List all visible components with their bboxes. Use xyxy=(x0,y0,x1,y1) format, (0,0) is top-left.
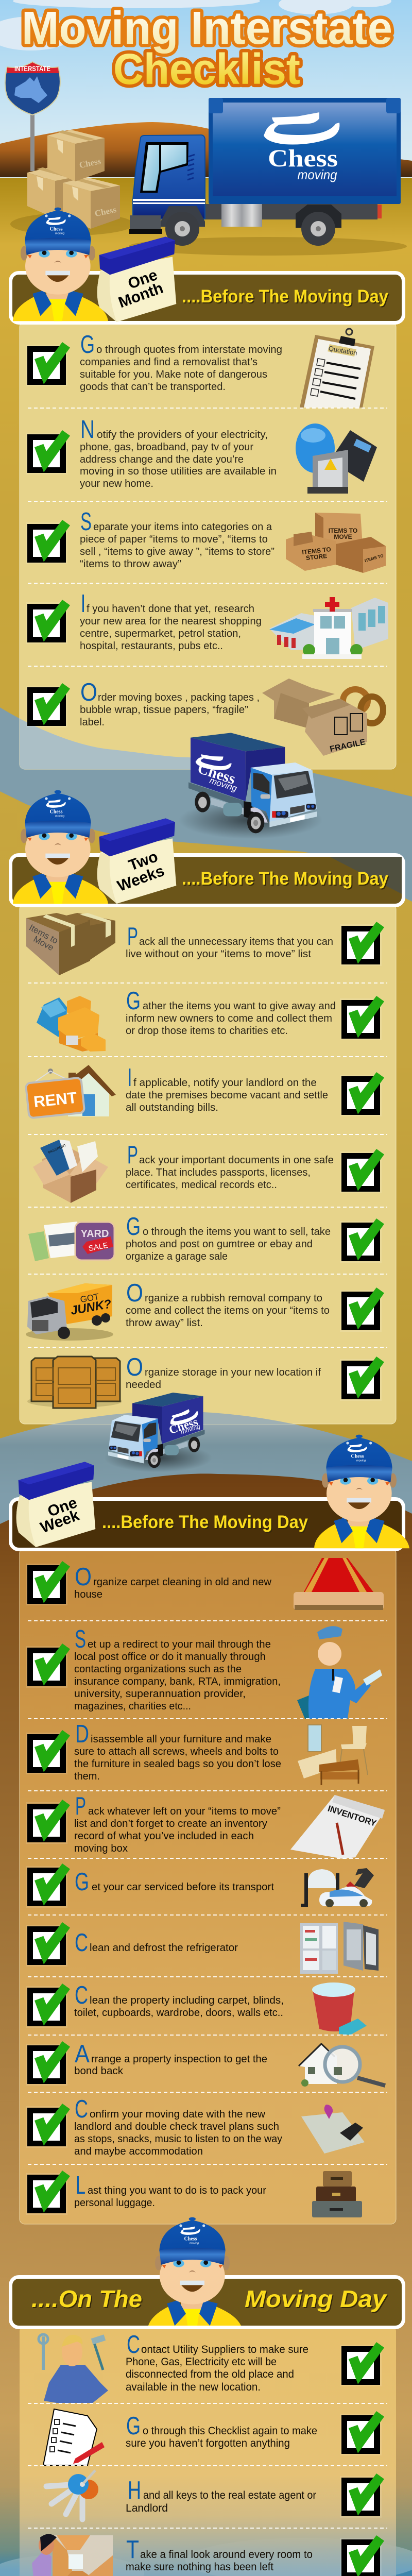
item text: label. xyxy=(80,717,105,728)
item text: sell , “items to give away ”, “items to store” xyxy=(80,546,274,557)
item text: address change and the date you’re xyxy=(80,454,244,465)
item text: ack whatever left on your “items to move” xyxy=(88,1806,281,1817)
icon: chess truck two xyxy=(104,1393,212,1472)
item text: P xyxy=(127,1141,138,1169)
heading: ....Before The Moving Day xyxy=(182,286,388,307)
icon: stacked suitcases xyxy=(312,2171,362,2217)
checkbox xyxy=(340,1218,384,1263)
item text: or drop those items to charities etc. xyxy=(126,1025,288,1037)
item text: C xyxy=(75,1981,88,2009)
item text: rder moving boxes , packing tapes , xyxy=(98,692,260,703)
item: quotes xyxy=(26,329,374,408)
item text: come and collect the items on your “items to xyxy=(126,1305,330,1316)
item text: throw away” list. xyxy=(126,1317,203,1329)
item: pack documents xyxy=(33,1140,384,1203)
delivery truck: moving xyxy=(298,167,337,182)
checkbox xyxy=(26,520,70,564)
icon: junk truck: GOT xyxy=(79,1292,100,1304)
heading: ....Before The Moving Day xyxy=(182,869,388,889)
item: storage xyxy=(27,1353,384,1408)
item text: o through quotes from interstate moving xyxy=(96,344,282,355)
dividers xyxy=(28,1621,387,2164)
item: research new area xyxy=(26,590,388,659)
item text xyxy=(74,1792,281,1854)
icon: boxes and tape: FRAGILE xyxy=(329,738,366,754)
calendar: one month: Month xyxy=(116,280,165,311)
item text: C xyxy=(127,2331,140,2359)
banner: one week xyxy=(10,1435,409,1550)
checkbox xyxy=(340,1072,384,1116)
item text: O xyxy=(126,1353,143,1381)
icon: handyman with tools xyxy=(39,2334,108,2403)
item text: place. That includes passports, licenses, xyxy=(126,1167,311,1178)
panel background xyxy=(20,2326,396,2576)
item text xyxy=(80,331,282,393)
item text: insurance company, bank, RTA, immigration, xyxy=(74,1676,281,1687)
icon: rent sign and house: RENT xyxy=(33,1089,78,1111)
calendar: one month xyxy=(97,236,176,322)
icon: car and wrench xyxy=(301,1868,374,1907)
item text: P xyxy=(75,1792,86,1820)
hill xyxy=(0,122,412,177)
item text: companies and find a removalist that’s xyxy=(80,357,258,368)
item text: make sure nothing has been left xyxy=(126,2561,273,2573)
icon: labelled boxes xyxy=(286,513,386,573)
item text: f applicable, notify your landlord on the xyxy=(133,1077,317,1089)
item text xyxy=(80,679,260,728)
road between month and two weeks sections xyxy=(0,707,412,902)
item text xyxy=(74,2095,282,2157)
item text: them. xyxy=(74,1771,100,1782)
item text xyxy=(126,1064,328,1113)
calendar: two weeks: Weeks xyxy=(115,862,167,895)
item text: toilet, cupboards, wardrobe, doors, walls etc.. xyxy=(74,2007,283,2019)
panel: two weeks checklist xyxy=(20,907,397,1424)
icon: bucket and sponge xyxy=(312,1982,367,2035)
item: carpet xyxy=(26,1558,384,1610)
checkbox xyxy=(26,600,70,644)
item text: o through this Checklist again to make xyxy=(143,2425,317,2437)
item: clean property xyxy=(26,1981,367,2035)
item: go through checklist xyxy=(44,2409,384,2465)
item text: personal luggage. xyxy=(74,2197,155,2209)
item text: rganize storage in your new location if xyxy=(145,1367,321,1378)
item text: O xyxy=(126,1279,143,1307)
checkbox xyxy=(26,1730,70,1774)
item text: P xyxy=(127,923,138,951)
checkbox xyxy=(26,1863,70,1908)
checkbox xyxy=(26,1800,70,1844)
icon: chess truck two: moving xyxy=(180,1422,201,1436)
item text xyxy=(126,923,333,960)
item text: onfirm your moving date with the new xyxy=(90,2109,266,2120)
item: rubbish removal xyxy=(26,1279,384,1341)
checkbox xyxy=(340,2535,384,2576)
item text: G xyxy=(80,331,95,359)
stacked cardboard boxes xyxy=(10,130,134,235)
item text: and maybe accommodation xyxy=(74,2146,203,2157)
item: give away items xyxy=(37,987,384,1052)
item text: G xyxy=(75,1868,89,1896)
icon: checklist and pencil xyxy=(44,2409,105,2465)
panel background xyxy=(20,907,397,1424)
delivery truck: Chess xyxy=(268,145,338,172)
item text xyxy=(80,416,277,489)
mascot xyxy=(314,1435,409,1548)
item text: photos and post on gumtree or ebay and xyxy=(126,1239,313,1250)
checkbox xyxy=(26,2171,70,2215)
dividers xyxy=(28,2403,387,2576)
item: confirm date xyxy=(26,2095,365,2157)
icon: chess truck two: Chess xyxy=(167,1415,199,1436)
icon: labelled boxes: MOVE xyxy=(334,533,352,540)
background: evening sky xyxy=(0,2550,412,2576)
item: notify providers xyxy=(26,416,377,494)
stacked cardboard boxes: Chess xyxy=(78,156,102,170)
item text: piece of paper “items to move”, “items to xyxy=(80,534,268,545)
checkbox xyxy=(26,342,70,386)
icon: inventory pad: INVENTORY xyxy=(327,1804,378,1828)
item text: record of what you’ve included in each xyxy=(74,1831,254,1842)
item: refrigerator xyxy=(26,1922,379,1974)
item text: I xyxy=(81,590,85,618)
checkbox xyxy=(26,683,70,727)
item: car service xyxy=(26,1863,374,1908)
heading: on the: ....On The xyxy=(31,2285,142,2312)
checkbox xyxy=(340,2473,384,2518)
item: disassemble furniture xyxy=(26,1720,368,1785)
item text: C xyxy=(75,2095,88,2123)
item text xyxy=(80,508,274,570)
item text: lean and defrost the refrigerator xyxy=(90,1942,238,1954)
item text: ack all the unnecessary items that you can xyxy=(139,936,333,947)
banner: on the moving day xyxy=(10,2217,404,2331)
item text: hospital, restaurants, pubs etc.. xyxy=(80,640,223,652)
title: Checklist xyxy=(113,45,300,93)
checkbox xyxy=(340,1357,384,1401)
background: brown section xyxy=(0,1520,412,2551)
item text: goods that can’t be transported. xyxy=(80,381,226,393)
item text: Landlord xyxy=(126,2502,168,2514)
item text: rrange a property inspection to get the xyxy=(91,2054,267,2065)
icon: fridges xyxy=(300,1922,379,1974)
title xyxy=(22,3,392,93)
delivery truck xyxy=(129,98,407,256)
item text: “items to throw away” xyxy=(80,558,181,570)
banner: one month xyxy=(10,208,404,323)
checkbox xyxy=(26,1922,70,1967)
item text: isassemble all your furniture and make xyxy=(91,1734,271,1745)
interstate road sign xyxy=(5,62,60,171)
item text: otify the providers of your electricity, xyxy=(97,429,268,440)
item text xyxy=(126,2536,313,2573)
item text: S xyxy=(75,1625,86,1653)
item: separate items xyxy=(26,508,386,573)
clouds xyxy=(0,0,391,50)
checkbox xyxy=(340,922,384,966)
item: order boxes xyxy=(26,679,383,756)
item text xyxy=(126,1353,321,1391)
item text: landlord and double check travel plans such xyxy=(74,2121,279,2132)
clouds behind panel four xyxy=(0,2538,412,2576)
item text: available in the new location. xyxy=(126,2381,261,2393)
item text: certificates, medical records etc.. xyxy=(126,1179,277,1191)
interstate road sign: INTERSTATE xyxy=(14,64,50,73)
checkbox xyxy=(340,2411,384,2455)
icon: labelled boxes: ITEMS TO xyxy=(364,553,384,563)
item text: all outstanding bills. xyxy=(126,1102,218,1113)
item text xyxy=(126,1213,331,1262)
item text xyxy=(74,1563,272,1600)
item text: H xyxy=(128,2477,141,2504)
checkbox xyxy=(340,1149,384,1193)
item text: contacting organizations such as the xyxy=(74,1664,242,1675)
panel: one week checklist xyxy=(20,1548,396,2224)
icon: yard sale: YARD xyxy=(81,1228,109,1240)
item: inventory xyxy=(26,1792,385,1859)
item text xyxy=(74,1981,284,2019)
icon: chess truck one: moving xyxy=(208,775,238,793)
item text: sure you haven’t forgotten anything xyxy=(126,2437,290,2449)
icon: gas, phone, electricity xyxy=(296,423,377,494)
item text xyxy=(74,1625,281,1712)
checkbox xyxy=(340,1287,384,1332)
item text xyxy=(80,590,262,652)
panel background xyxy=(20,325,397,770)
calendar: one week: One xyxy=(45,1494,79,1520)
item text: moving in so those utilities are available in xyxy=(80,466,277,477)
icon: yard sale xyxy=(28,1222,114,1261)
title: Moving Interstate xyxy=(22,3,392,54)
calendar: one week xyxy=(16,1462,95,1547)
item text: G xyxy=(126,1213,141,1241)
icon: chess truck one: Chess xyxy=(196,759,237,788)
dividers xyxy=(28,408,387,666)
icon: passport box: PASSPORT xyxy=(48,1144,67,1155)
item: mail redirect xyxy=(26,1625,382,1719)
item text: bond back xyxy=(74,2065,124,2077)
panel: on the moving day checklist xyxy=(20,2326,396,2576)
item text xyxy=(126,987,336,1037)
item text xyxy=(74,1720,281,1782)
item text: house xyxy=(74,1589,102,1600)
icon: bunch of keys xyxy=(46,2470,98,2519)
icon: inventory pad xyxy=(290,1795,385,1859)
item text: live without on your “items to move” list xyxy=(126,948,311,960)
item text: moving box xyxy=(74,1843,128,1854)
item text: O xyxy=(80,679,97,706)
item text xyxy=(75,1868,274,1896)
item text xyxy=(126,1279,330,1329)
checkbox xyxy=(26,1561,70,1605)
icon: clipboard quotation: Quotation xyxy=(328,344,358,357)
item text: ontact Utility Suppliers to make sure xyxy=(141,2344,308,2355)
item text: D xyxy=(75,1720,89,1748)
mascot xyxy=(13,208,108,321)
mascot xyxy=(13,790,108,904)
calendar: two weeks: Two xyxy=(126,848,160,874)
icon: house and magnifier xyxy=(299,2044,385,2087)
item text: et up a redirect to your mail through the xyxy=(88,1639,271,1650)
heading: moving day: Moving Day xyxy=(245,2285,388,2312)
icon: local buildings xyxy=(269,597,388,659)
item text: o through the items you want to sell, take xyxy=(143,1226,331,1238)
hero scene xyxy=(0,0,412,256)
item: pack unnecessary xyxy=(26,913,384,975)
item text: as stops, snacks, music to listen to on the way xyxy=(74,2133,282,2145)
item text: sure to attach all screws, wheels and bolts to xyxy=(74,1746,279,1757)
item text xyxy=(126,1141,334,1191)
item text: phone, gas, broadband, pay tv of your xyxy=(80,442,253,453)
sky xyxy=(0,0,412,178)
icon: clipboard quotation xyxy=(300,329,374,408)
calendar: two weeks xyxy=(97,818,176,904)
item text: lean the property including carpet, blinds, xyxy=(90,1995,284,2006)
item text: inform new owners to come and collect them xyxy=(126,1013,332,1024)
item text: bubble wrap, tissue papers, “fragile” xyxy=(80,704,248,716)
item text: your new area for the nearest shopping xyxy=(80,616,262,627)
item text: eparate your items into categories on a xyxy=(93,521,272,533)
checkbox xyxy=(26,1984,70,2028)
brown hill xyxy=(0,1473,412,1540)
checkbox xyxy=(26,430,70,474)
checkbox xyxy=(26,2041,70,2086)
item: inspection xyxy=(26,2040,385,2087)
item text: disconnected from the old place and xyxy=(126,2368,294,2380)
icon: orange boxes xyxy=(37,996,106,1052)
item text: N xyxy=(80,416,95,444)
item text: et your car serviced before its transport xyxy=(92,1882,274,1893)
icon: labelled boxes: ITEMS TO xyxy=(302,546,331,556)
item: final look xyxy=(32,2534,384,2576)
background: gold ground xyxy=(0,177,412,1527)
item: notify landlord xyxy=(26,1064,384,1118)
checkbox xyxy=(26,1643,70,1688)
icon: map and phone xyxy=(301,2105,365,2154)
icon: storage drawers xyxy=(27,1357,122,1408)
item text: suitable for you. Make note of dangerous xyxy=(80,369,267,380)
item text: date the premises become vacant and settle xyxy=(126,1090,328,1101)
item text: A xyxy=(75,2040,90,2068)
icon: boxes to move xyxy=(26,913,115,975)
stacked cardboard boxes: Chess xyxy=(94,205,117,218)
item text: ast thing you want to do is to pack your xyxy=(88,2185,266,2196)
item text xyxy=(126,2477,316,2514)
item text: ack your important documents in one safe xyxy=(139,1155,334,1166)
heading: ....Before The Moving Day xyxy=(102,1512,308,1532)
banner: two weeks xyxy=(10,790,404,906)
item text xyxy=(75,1929,238,1957)
item text: your new home. xyxy=(80,478,153,489)
icon: labelled boxes: ITEMS TO xyxy=(329,527,357,534)
icon: junk truck xyxy=(26,1283,113,1341)
icon: red carpet roll xyxy=(294,1558,384,1610)
item text: S xyxy=(80,508,92,536)
item text xyxy=(74,2172,266,2209)
item text: f you haven’t done that yet, research xyxy=(87,603,254,615)
item text: rganize carpet cleaning in old and new xyxy=(93,1577,272,1588)
mascot xyxy=(147,2217,243,2331)
item text: university, superannuation provider, xyxy=(74,1688,246,1700)
item text xyxy=(126,2412,317,2449)
icon: chess truck one xyxy=(179,733,323,839)
icon: boxes to move: Items to xyxy=(27,923,60,946)
icon: junk truck: JUNK? xyxy=(70,1297,113,1318)
calendar: one month: One xyxy=(126,266,160,293)
item: sell items xyxy=(28,1213,384,1263)
item: luggage xyxy=(26,2171,362,2217)
icon: labelled boxes: STORE xyxy=(305,552,328,562)
item text: the furniture in sealed bags so you don’t lose xyxy=(74,1758,281,1770)
item text: Phone, Gas, Electricity etc will be xyxy=(126,2356,277,2368)
item text: and all keys to the real estate agent or xyxy=(143,2489,316,2501)
icon: man viewing empty room xyxy=(32,2534,113,2576)
calendar: one week: Week xyxy=(38,1507,82,1536)
item text: ake a final look around every room to xyxy=(140,2549,313,2561)
panel background xyxy=(20,1548,396,2224)
item text: G xyxy=(126,987,141,1015)
item text: magazines, charities etc... xyxy=(74,1701,191,1712)
item text xyxy=(74,2040,267,2077)
item text: needed xyxy=(126,1379,161,1391)
icon: passport box xyxy=(33,1140,108,1203)
item: contact utilities xyxy=(39,2331,384,2403)
item text xyxy=(126,2331,308,2393)
checkbox xyxy=(340,2342,384,2386)
item text: list and don’t forget to create an inventory xyxy=(74,1818,267,1829)
item text: L xyxy=(76,2172,85,2199)
checkbox xyxy=(340,996,384,1040)
icon: furniture xyxy=(298,1725,368,1785)
icon: boxes and tape xyxy=(262,679,383,756)
checkbox xyxy=(26,2104,70,2148)
item text: C xyxy=(75,1929,88,1957)
panel: one month checklist xyxy=(20,325,397,770)
item text: local post office or do it manually through xyxy=(74,1651,266,1663)
icon: yard sale: SALE xyxy=(88,1241,109,1253)
dividers xyxy=(28,983,387,1347)
road between two weeks and one week sections xyxy=(0,1411,412,1530)
item: hand keys xyxy=(46,2470,384,2519)
item text: I xyxy=(128,1064,132,1092)
icon: boxes to move: Move xyxy=(32,934,55,953)
item text: T xyxy=(126,2536,139,2564)
icon: postman xyxy=(297,1626,382,1719)
icon: rent sign and house xyxy=(26,1065,116,1118)
item text: organize a garage sale xyxy=(126,1251,228,1262)
item text: O xyxy=(75,1563,92,1591)
item text: centre, supermarket, petrol station, xyxy=(80,628,241,639)
item text: rganize a rubbish removal company to xyxy=(145,1293,322,1304)
item text: G xyxy=(126,2412,141,2440)
item text: ather the items you want to give away and xyxy=(143,1001,336,1012)
